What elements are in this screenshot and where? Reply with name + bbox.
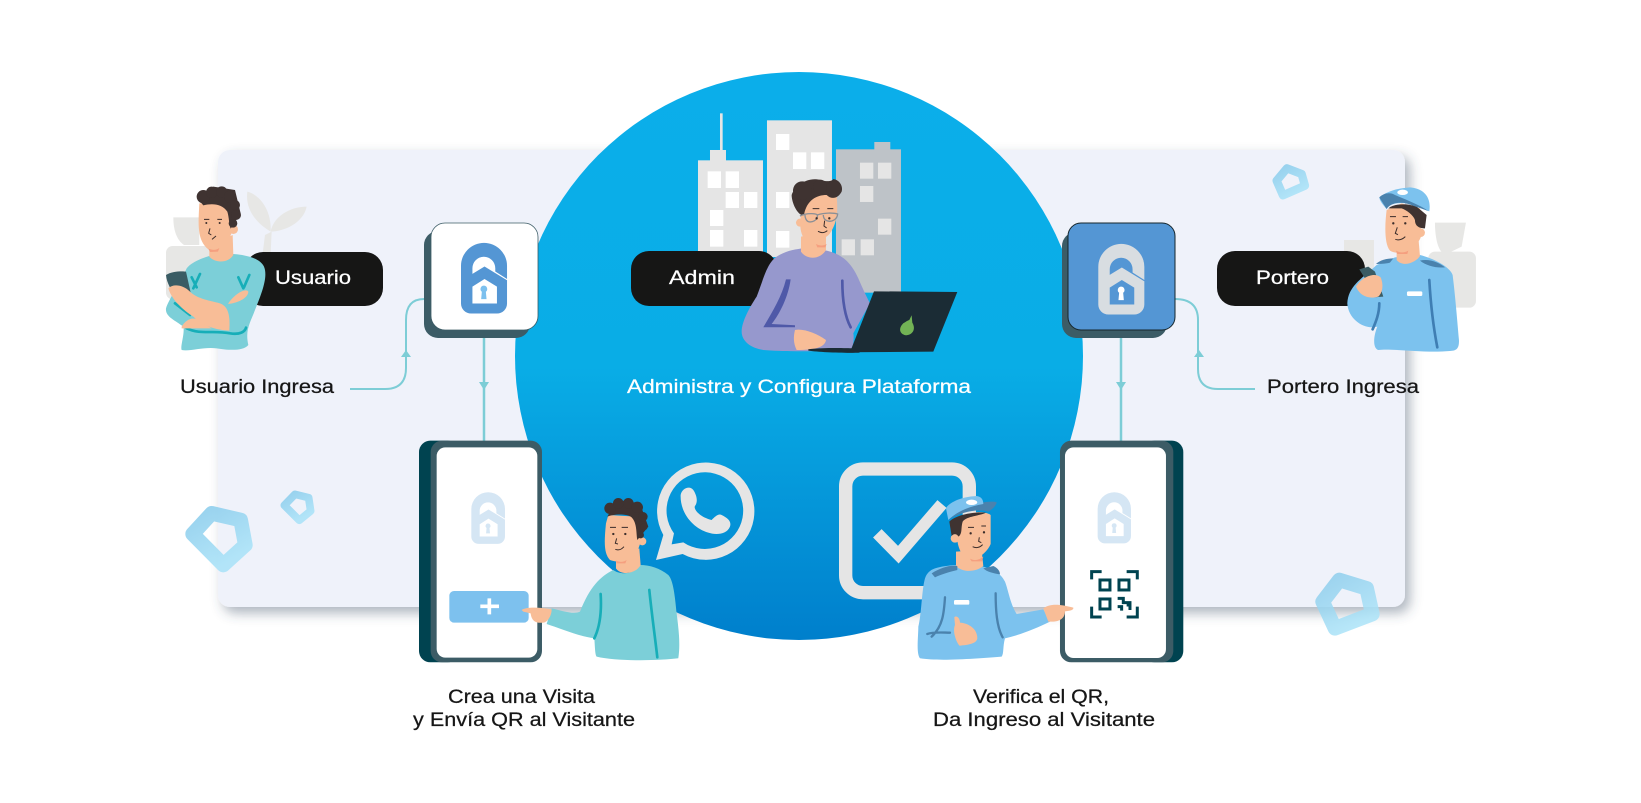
text: Crea una Visita: Crea una Visita [448, 687, 595, 708]
arrow head: user vertical [479, 382, 489, 390]
pill: Usuario: Usuario [275, 268, 351, 289]
blue circle [515, 72, 1083, 640]
decorative pentagon: right bottom [1323, 580, 1372, 628]
connector: usuario ingresa to lock card [350, 299, 424, 389]
plant backdrop: usuario [166, 192, 307, 299]
arrow head: guard vertical [1116, 382, 1126, 390]
plant backdrop: portero [1344, 223, 1476, 308]
arrow head: portero connector [1194, 350, 1204, 357]
character: guard pointing [918, 496, 1073, 660]
decorative pentagon: left small [284, 494, 311, 520]
lock card: user [424, 223, 538, 338]
icon: QR code [1092, 572, 1137, 617]
icon: check box [846, 469, 969, 593]
character: admin with laptop [742, 179, 957, 353]
phone: user [419, 441, 542, 662]
connector: portero ingresa to lock card [1175, 299, 1255, 389]
pill: Portero [1217, 251, 1365, 306]
pill: Portero: Portero [1256, 268, 1329, 289]
lock card: guard [1062, 223, 1175, 338]
text: Administra y Configura Plataforma: Administra y Configura Plataforma [627, 377, 972, 398]
connector: guard card to phone [1120, 338, 1122, 442]
character: usuario with phone [166, 186, 265, 350]
text: Crea una Visita [413, 687, 635, 731]
decorative pentagon: left large [193, 513, 245, 565]
text: Verifica el QR: Verifica el QR, [973, 687, 1109, 708]
buildings [698, 113, 901, 293]
pill: Usuario [245, 252, 383, 306]
text: Crea una Visita: y Envía QR al Visitante [413, 710, 635, 731]
text: Verifica el QR: Da Ingreso al Visitante [933, 710, 1155, 731]
text: Portero Ingresa: Portero Ingresa [1267, 377, 1419, 398]
pill: Admin [631, 251, 777, 306]
phone: guard [1060, 441, 1183, 662]
connector: user card to phone [483, 338, 485, 442]
decorative pentagon: right top [1277, 168, 1305, 195]
arrow head: usuario connector [401, 350, 411, 357]
character: usuario pointing [522, 498, 679, 660]
background panel [218, 150, 1405, 607]
text: Verifica el QR [933, 687, 1155, 731]
character: portero with radio [1347, 187, 1459, 352]
text: Usuario Ingresa: Usuario Ingresa [180, 377, 334, 398]
icon: whatsapp [656, 462, 754, 560]
pill: Admin: Admin [669, 268, 735, 289]
